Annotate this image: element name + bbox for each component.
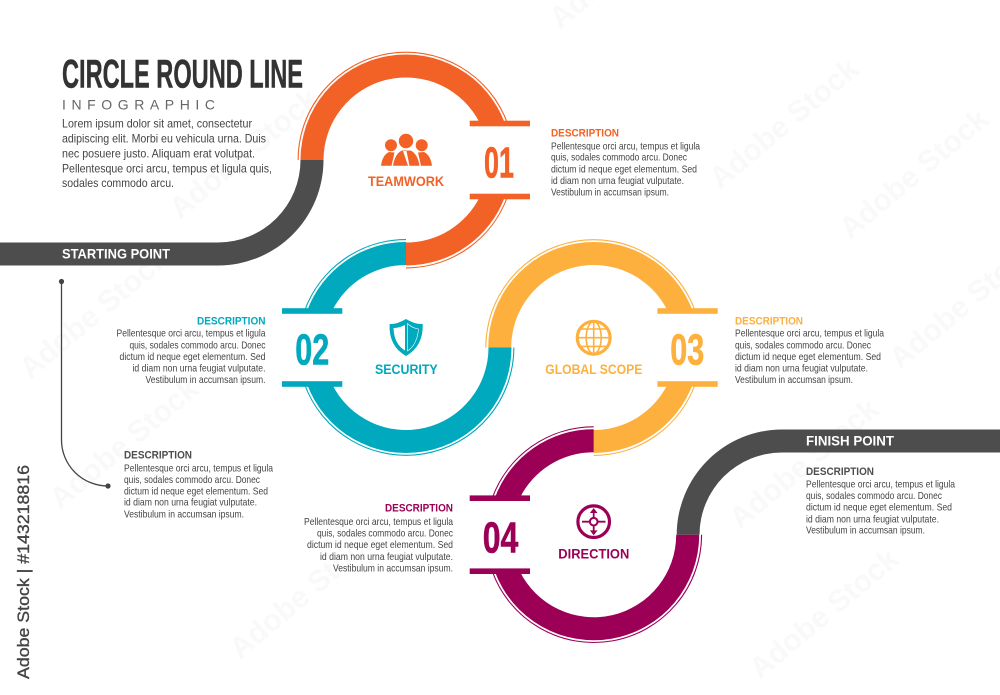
- icon: security shield: [390, 319, 423, 356]
- starting point track: [0, 160, 324, 266]
- description: starting point: [124, 450, 273, 521]
- intro text block: Lorem ipsum dolor sit amet, consectetur: [62, 117, 252, 131]
- description 01: dictum id neque eget elementum. Sed: [551, 164, 697, 175]
- description 03: [735, 316, 884, 386]
- description: finish point: dictum id neque eget elementum. Sed: [806, 502, 952, 514]
- label: direction: DIRECTION: [558, 546, 629, 561]
- description: finish point: id diam non urna feugiat vulputate.: [806, 514, 939, 525]
- description 02: quis, sodales commodo arcu. Donec: [130, 340, 266, 352]
- background watermark: Adobe Stock: [703, 52, 865, 195]
- description 03: id diam non urna feugiat vulputate.: [735, 364, 868, 375]
- description 04: quis, sodales commodo arcu. Donec: [317, 529, 453, 540]
- number 04: 04: [483, 513, 519, 562]
- intro text block: nec posuere justo. Aliquam erat volutpat.: [62, 146, 255, 160]
- description 01: [551, 128, 700, 198]
- description: finish point: Vestibulum in accumsan ipsum.: [806, 526, 925, 536]
- description 04: dictum id neque eget elementum. Sed: [307, 540, 453, 551]
- number 02: 02: [295, 325, 329, 374]
- background watermark: Adobe Stock: [43, 372, 205, 515]
- finish point track: [677, 430, 1000, 535]
- intro text block: adipiscing elit. Morbi eu vehicula urna. Duis: [62, 132, 266, 146]
- description: finish point: quis, sodales commodo arcu. Donec: [806, 491, 942, 502]
- description 01: Pellentesque orci arcu, tempus et ligula: [551, 141, 700, 152]
- description: finish point: DESCRIPTION: [806, 466, 874, 478]
- title: CIRCLE ROUND LINE: [62, 53, 303, 97]
- description 04: [304, 502, 453, 574]
- ring 4: direction: [470, 427, 702, 642]
- description 01: Vestibulum in accumsan ipsum.: [551, 187, 669, 198]
- description 03: quis, sodales commodo arcu. Donec: [735, 340, 871, 352]
- description 04: DESCRIPTION: [385, 502, 453, 514]
- description 04: Pellentesque orci arcu, tempus et ligula: [304, 517, 453, 528]
- intro text block: [62, 117, 272, 190]
- background watermark: Adobe Stock: [13, 242, 175, 385]
- description: finish point: Pellentesque orci arcu, tempus et ligula: [806, 480, 955, 491]
- subtitle: INFOGRAPHIC: [62, 96, 215, 112]
- description 02: DESCRIPTION: [197, 316, 266, 328]
- description 01: id diam non urna feugiat vulputate.: [551, 176, 684, 187]
- description 04: Vestibulum in accumsan ipsum.: [333, 563, 453, 574]
- description 02: dictum id neque eget elementum. Sed: [120, 352, 266, 363]
- description: starting point: quis, sodales commodo arcu. Donec: [124, 475, 260, 486]
- description: starting point: id diam non urna feugiat vulputate.: [124, 498, 257, 509]
- ring 2: security: [282, 240, 514, 455]
- icon: globe: [577, 321, 610, 354]
- timeline connector: [59, 279, 111, 489]
- background watermark: Adobe Stock: [163, 82, 325, 225]
- description 03: DESCRIPTION: [735, 316, 803, 328]
- background watermark: Adobe Stock: [723, 392, 885, 535]
- description 03: dictum id neque eget elementum. Sed: [735, 352, 881, 363]
- icon: teamwork people: [381, 134, 432, 166]
- description 01: DESCRIPTION: [551, 128, 619, 140]
- ring 3: global scope: [486, 240, 718, 455]
- number 03: 03: [670, 325, 704, 374]
- description 02: Vestibulum in accumsan ipsum.: [146, 375, 266, 386]
- description 02: id diam non urna feugiat vulputate.: [132, 364, 266, 375]
- label: teamwork: TEAMWORK: [368, 174, 444, 189]
- description 02: Pellentesque orci arcu, tempus et ligula: [116, 329, 266, 340]
- starting point label: STARTING POINT: [62, 246, 170, 262]
- description: starting point: dictum id neque eget elementum. Sed: [124, 486, 268, 497]
- background watermark: Adobe Stock: [223, 522, 385, 665]
- description 03: Vestibulum in accumsan ipsum.: [735, 375, 853, 386]
- intro text block: sodales commodo arcu.: [62, 176, 174, 190]
- label: global scope: GLOBAL SCOPE: [545, 362, 642, 377]
- description 01: quis, sodales commodo arcu. Donec: [551, 153, 687, 164]
- description: finish point: [806, 466, 955, 536]
- description: starting point: DESCRIPTION: [124, 450, 192, 462]
- background watermark: Adobe Stock: [743, 542, 905, 685]
- description 03: Pellentesque orci arcu, tempus et ligula: [735, 329, 884, 340]
- background watermark: Adobe Stock: [833, 102, 995, 245]
- icon: compass direction: [578, 506, 610, 538]
- ring 1: teamwork: [298, 52, 530, 268]
- description: starting point: Pellentesque orci arcu, tempus et ligula: [124, 463, 273, 474]
- intro text block: Pellentesque orci arcu, tempus et ligula quis,: [62, 161, 272, 175]
- stock credit: Adobe Stock | #143218816: [14, 465, 33, 679]
- description: starting point: Vestibulum in accumsan ipsum.: [124, 510, 244, 521]
- description 02: [116, 316, 266, 386]
- number 01: 01: [484, 138, 514, 187]
- label: security: SECURITY: [375, 362, 438, 377]
- description 04: id diam non urna feugiat vulputate.: [320, 552, 453, 563]
- finish point label: FINISH POINT: [806, 433, 894, 449]
